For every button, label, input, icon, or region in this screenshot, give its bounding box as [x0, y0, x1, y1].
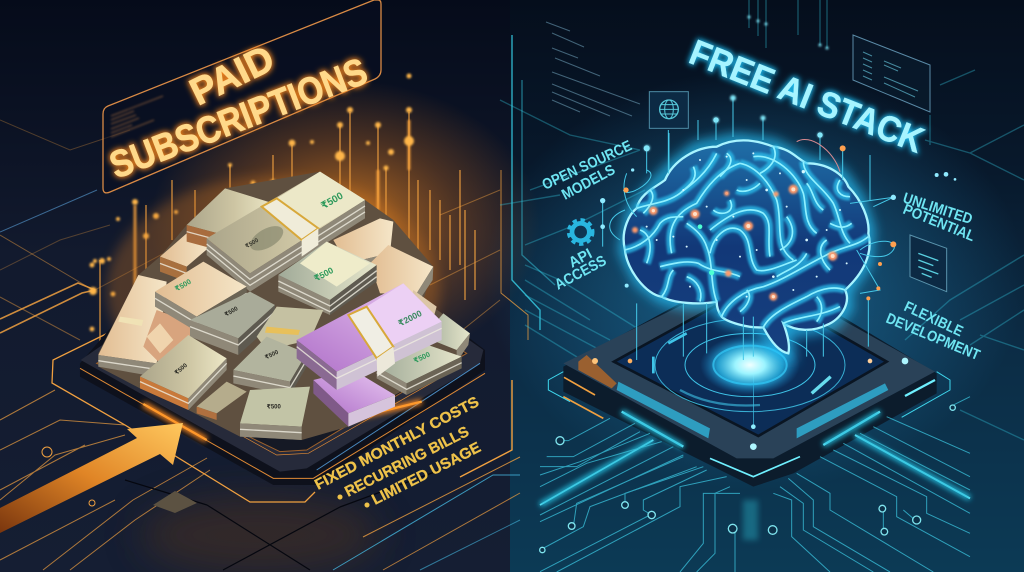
brain outer halo: [625, 140, 868, 353]
platform orange corner: [578, 355, 617, 388]
bundle: mid left peach: [155, 262, 247, 332]
circuit lines: free side background: [500, 0, 1024, 440]
title text: PAID: [184, 38, 281, 114]
centre vertical glow below platform: [743, 500, 758, 540]
circuit nodes: [540, 405, 955, 553]
money glow: [107, 177, 440, 403]
labels: free stack features: DEVELOPMENT: [883, 310, 982, 364]
platform: paid side: [80, 290, 485, 485]
bundle: purple low: [313, 370, 395, 427]
icon: globe box: [649, 92, 688, 128]
labels: free stack features: UNLIMITED: [901, 190, 975, 228]
title text: SUBSCRIPTIONS: [104, 51, 373, 187]
bundle: far right: [370, 245, 433, 307]
brain orange synapses: [632, 185, 837, 301]
bundle: left peach: [160, 233, 210, 282]
text: paid drawbacks: FIXED MONTHLY COSTS: [312, 393, 482, 494]
labels: free stack features: [540, 137, 982, 364]
holographic brain: [600, 117, 956, 360]
screen rings: [653, 318, 845, 427]
bundle: right edge: [423, 313, 470, 362]
floor chip: [153, 491, 197, 513]
brain silhouette: [624, 140, 870, 353]
platform body: [80, 290, 485, 485]
bundle: top main 500: [207, 172, 365, 292]
platform: free side: [540, 263, 970, 505]
bundle: centre green: [233, 337, 307, 395]
labels: free stack features: POTENTIAL: [901, 201, 977, 245]
circuit lines: paid side background: [0, 120, 528, 570]
bundle: top main 500: ₹500: [244, 237, 260, 250]
bundle: top left: [187, 188, 273, 255]
title text: FREE AI STACK: [684, 31, 930, 161]
platform blue edge panels: [617, 382, 710, 438]
glowing edge strips: [143, 402, 422, 440]
labels: free stack features: FLEXIBLE: [901, 298, 966, 340]
cyan frame traces: [548, 372, 950, 417]
bundle: centre green: ₹500: [264, 349, 280, 361]
bundle: front left tan: ₹500: [173, 362, 189, 377]
icon: gear: [569, 220, 593, 244]
bundle: mid grey: ₹500: [223, 305, 240, 318]
bundle: top main 500: ₹500: [319, 190, 346, 212]
platform top face: [81, 310, 483, 472]
orbit arcs and satellite nodes: [603, 120, 894, 360]
rising gold bars and dots: [89, 74, 475, 350]
orange glow behind money: [150, 80, 540, 370]
platform gold rims: [80, 363, 485, 478]
warm floor glow: [140, 495, 380, 572]
title: free ai stack: [684, 31, 930, 161]
satellite nodes above brain: [644, 16, 828, 170]
centre divider: [512, 35, 555, 330]
labels: free stack features: MODELS: [559, 161, 618, 204]
bundle: mid grey: [190, 292, 275, 355]
arrow: orange pointer: [0, 423, 183, 533]
bundle: far right low green: [377, 343, 462, 395]
platform inner tray: [97, 310, 467, 452]
glowing strips: [540, 380, 970, 505]
orange side strips: [563, 377, 603, 418]
background: paid side: [0, 0, 515, 572]
bundle: right middle green: [278, 242, 377, 315]
bundle: small back low: [197, 382, 247, 420]
text: paid drawbacks: RECURRING BILLS: [342, 423, 472, 501]
title glow: SUBSCRIPTIONS: [104, 51, 373, 187]
bundle: behind centre: [257, 307, 323, 350]
bundle: front centre: ₹500: [267, 403, 281, 410]
bundle: right filler: [407, 290, 437, 330]
bundle: far left: [98, 275, 167, 377]
code window: free side: [853, 35, 930, 112]
bundle: right middle green: ₹500: [312, 265, 335, 283]
floor grid lines: [125, 470, 440, 570]
icon: window panel: [910, 235, 947, 292]
text: paid drawbacks: LIMITED USAGE: [369, 439, 484, 509]
pile of rupee notes: [98, 172, 470, 440]
screen core glow: [700, 335, 800, 395]
bundle: crumpled behind: [143, 310, 193, 363]
bundle: mid left peach: ₹500: [173, 277, 193, 293]
platform corner lights: [592, 358, 908, 450]
brain fold glow: [625, 147, 868, 327]
bundle: front centre: [240, 387, 310, 440]
labels: free stack features: API: [566, 245, 595, 272]
title glow: PAID: [184, 38, 281, 114]
bundle: far right low green: ₹500: [412, 350, 432, 365]
platform screen: [614, 285, 887, 436]
background: free side: [510, 0, 1024, 572]
bundle: front left tan: [140, 335, 227, 410]
labels: free stack features: ACCESS: [552, 252, 609, 294]
brain sparkle dots: [646, 152, 848, 298]
platform body: [563, 263, 937, 487]
circuit traces: bottom right: [540, 397, 970, 572]
title fine print: [111, 96, 163, 137]
blue glow behind brain: [485, 70, 1024, 490]
bundle: purple 2000: ₹2000: [396, 308, 424, 328]
brain green synapses: [698, 224, 714, 275]
brain folds: [625, 147, 868, 327]
pile shadow mass: [98, 172, 470, 440]
code lines: free side: [546, 22, 640, 116]
labels: free stack features: OPEN SOURCE: [540, 137, 635, 194]
platform top bevel: [563, 270, 935, 458]
title frame: [103, 0, 381, 193]
bundle: purple 2000: [297, 283, 442, 390]
title glow: FREE AI STACK: [684, 31, 930, 161]
panel: paid subscriptions title: [103, 0, 381, 193]
bundle: back right: [333, 218, 393, 277]
